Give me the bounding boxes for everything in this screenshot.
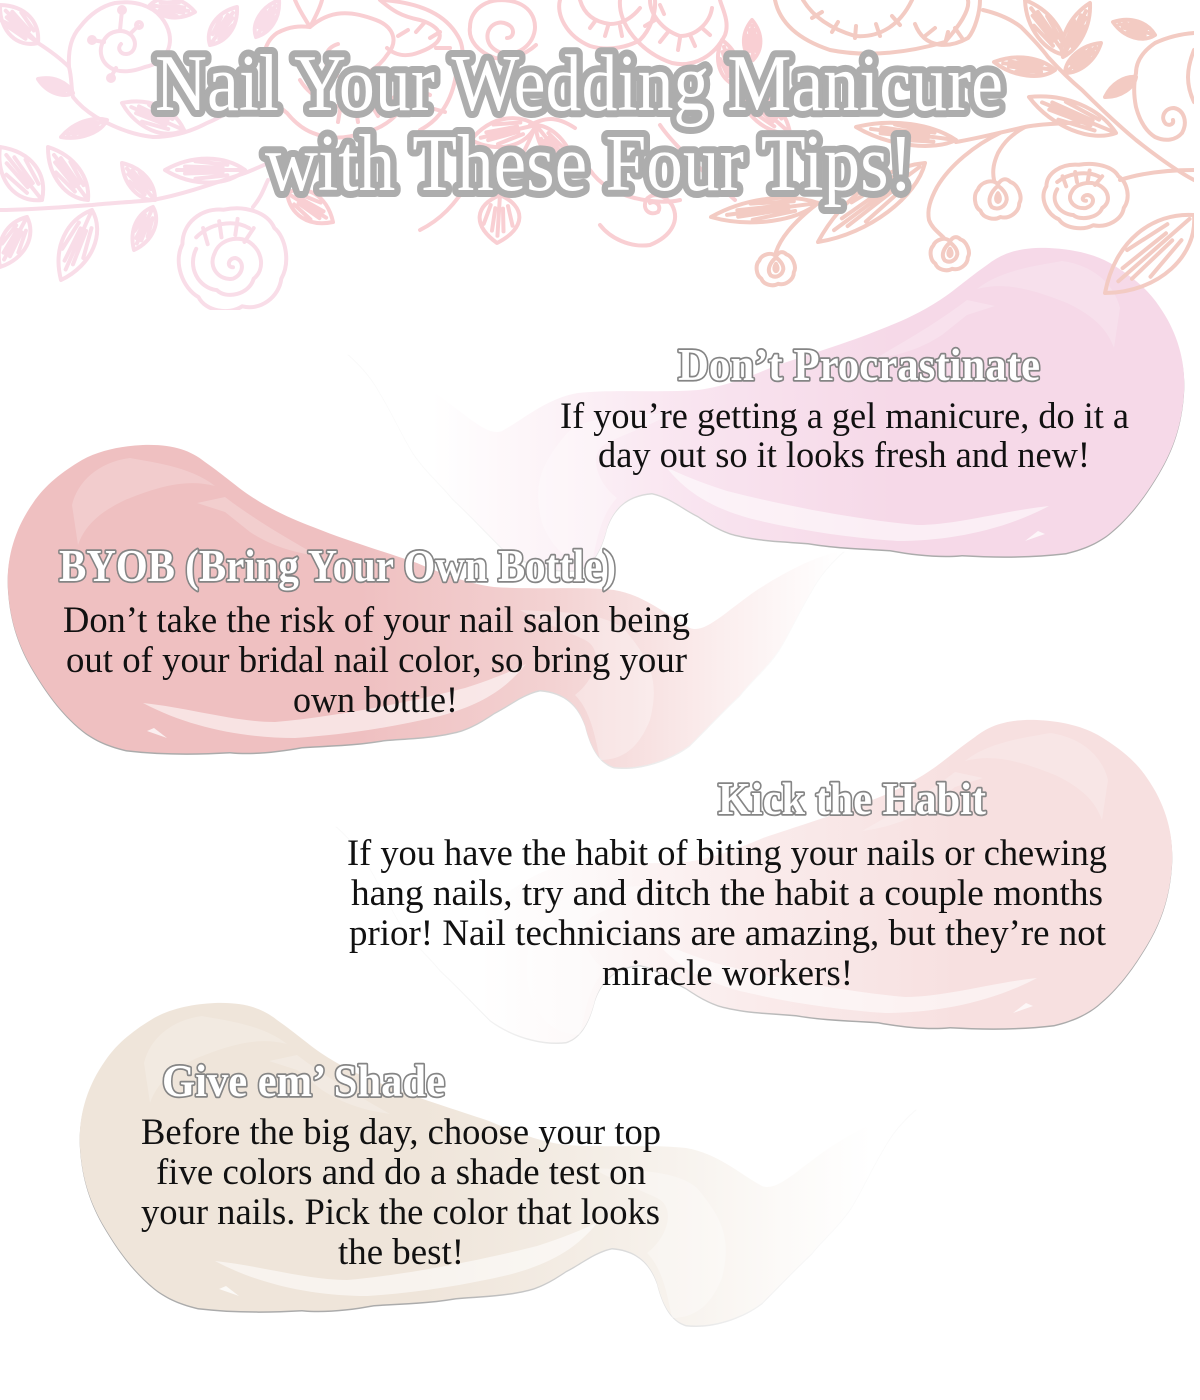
tip 3 body text: prior! Nail technicians are amazing, but they’re not xyxy=(349,913,1107,954)
tip 4: Give em' Shade xyxy=(141,1055,661,1273)
tip 2 body text: own bottle! xyxy=(293,680,458,721)
floral: left pink branches xyxy=(0,0,286,311)
tip 4 body text: your nails. Pick the color that looks xyxy=(141,1192,660,1233)
tip 1 body text: day out so it looks fresh and new! xyxy=(598,435,1090,476)
tip 1 body text xyxy=(560,396,1129,476)
tip 4 body text xyxy=(141,1112,661,1273)
tip 2 body text xyxy=(63,600,690,721)
tip 3 heading: Kick the Habit xyxy=(718,773,987,824)
tip 2 body text: out of your bridal nail color, so bring your xyxy=(66,640,687,681)
title: Nail Your Wedding Manicure xyxy=(155,40,1003,128)
tip 4 body text: Before the big day, choose your top xyxy=(141,1112,661,1153)
floral: right rose and branches xyxy=(710,0,1200,312)
tip 2 heading: BYOB (Bring Your Own Bottle) xyxy=(59,540,616,591)
floral lace header xyxy=(0,0,1200,312)
panel: BYOB polish swatch xyxy=(8,445,845,769)
title: with These Four Tips! xyxy=(265,120,913,208)
tip 2: BYOB xyxy=(59,540,690,721)
title xyxy=(155,40,1003,208)
tip 1 body text: If you’re getting a gel manicure, do it a xyxy=(560,396,1129,437)
panel: Give em' Shade polish swatch xyxy=(80,1003,917,1327)
tip 3: Kick the Habit xyxy=(347,773,1107,994)
tip 3 body text: If you have the habit of biting your nails or chewing xyxy=(347,833,1107,874)
tip 2 body text: Don’t take the risk of your nail salon being xyxy=(63,600,690,641)
tip 1 heading: Don’t Procrastinate xyxy=(678,339,1040,390)
tip 3 body text: hang nails, try and ditch the habit a couple months xyxy=(351,873,1103,914)
tip 4 body text: five colors and do a shade test on xyxy=(156,1152,646,1193)
panel: Don't Procrastinate polish swatch xyxy=(347,248,1184,572)
tip 3 body text xyxy=(347,833,1107,994)
tip 1: Don't Procrastinate xyxy=(560,339,1129,476)
panel: Kick the Habit polish swatch xyxy=(335,720,1172,1044)
tip 4 body text: the best! xyxy=(338,1232,464,1273)
floral: centre roses xyxy=(262,0,798,246)
tip 4 heading: Give em’ Shade xyxy=(162,1055,445,1106)
tip 3 body text: miracle workers! xyxy=(602,953,853,994)
